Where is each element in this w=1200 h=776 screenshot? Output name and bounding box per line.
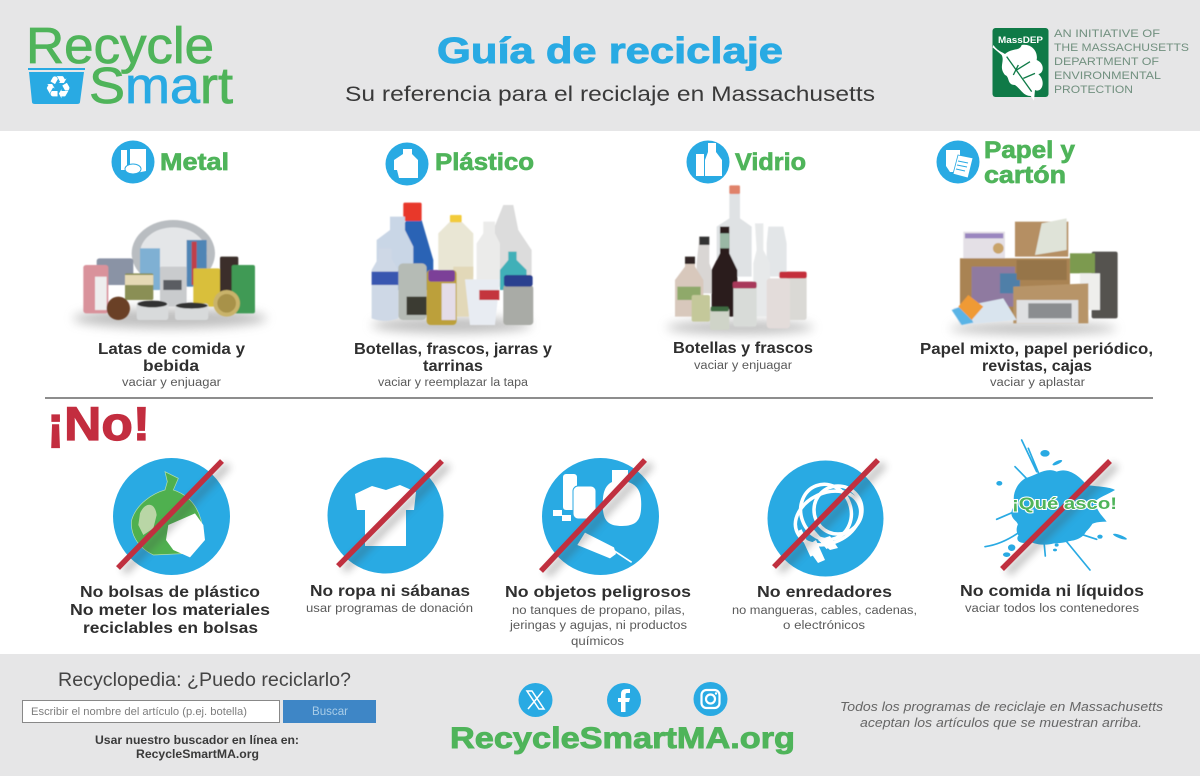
label: no hazardous objects (505, 584, 691, 648)
label: paper: vaciar y aplastar (990, 377, 1085, 389)
label: no clothing: usar programas de donación (306, 603, 473, 615)
item: no food or liquids (960, 440, 1144, 615)
label: no food or liquids (960, 583, 1144, 615)
note: aceptan los artículos que se muestran arriba. (860, 715, 1142, 730)
icon: Instagram (694, 682, 728, 716)
label: no plastic bags: No meter los materiales (70, 602, 270, 619)
icon: paper and cardboard (936, 140, 980, 184)
title: Guía de reciclaje (437, 30, 783, 71)
icon: metal cans (112, 140, 154, 184)
icon: hazardous objects crossed out (541, 458, 659, 575)
label: metal: bebida (143, 358, 199, 375)
label: paper: Papel mixto, papel periódico, (920, 341, 1153, 358)
label: metal (98, 341, 245, 389)
logo: Recycle Smart: Smart (89, 57, 233, 114)
item: no tanglers (732, 460, 917, 632)
label: paper (920, 341, 1153, 389)
label: no tanglers (732, 584, 917, 632)
heading: No: ¡No! (47, 397, 150, 450)
label: paper: revistas, cajas (982, 358, 1092, 375)
label: no plastic bags: No bolsas de plástico (80, 584, 260, 601)
panel: metal (73, 140, 267, 389)
photo: glass bottles (667, 185, 813, 334)
heading: Vidrio: Vidrio (735, 149, 806, 176)
label: no hazardous objects: químicos (571, 636, 624, 648)
logo: MassDEP: ENVIRONMENTAL (1054, 70, 1161, 82)
item: no plastic bags (70, 458, 270, 637)
footer band (0, 654, 1200, 776)
label: no plastic bags: reciclables en bolsas (83, 620, 258, 637)
icon: Facebook (607, 683, 641, 717)
label: no hazardous objects: No objetos peligrosos (505, 584, 691, 601)
icon: X (518, 683, 552, 717)
icon: splat crossed out (985, 440, 1127, 573)
search panel: Recyclopedia: Escribir el nombre del artículo (p.ej. botella) (31, 706, 247, 718)
icon: plastic bottles (386, 142, 428, 186)
logo: MassDEP: DEPARTMENT OF (1054, 56, 1159, 68)
website address: RecycleSmartMA.org (450, 722, 795, 755)
panel: plastic (354, 142, 552, 389)
search panel: Recyclopedia: RecycleSmartMA.org (136, 749, 259, 761)
logo: Recycle Smart (26, 17, 233, 114)
icon: shirt crossed out (328, 458, 448, 574)
heading: Metal: Metal (160, 149, 229, 176)
logo: MassDEP: MassDEP (998, 35, 1043, 45)
logo: Recycle Smart: Recycle (26, 17, 214, 74)
label: metal: Latas de comida y (98, 341, 245, 358)
label: no hazardous objects: jeringas y agujas, ni productos (509, 620, 687, 632)
label: glass: Botellas y frascos (673, 340, 813, 357)
note (840, 699, 1164, 730)
heading: Plástico: Plástico (435, 149, 534, 176)
search panel: Recyclopedia: Usar nuestro buscador en línea en: (95, 735, 299, 747)
label: metal: vaciar y enjuagar (122, 377, 221, 389)
icon: splat crossed out: ¡Qué asco! (1012, 494, 1117, 513)
logo: MassDEP: THE MASSACHUSETTS (1054, 42, 1189, 54)
logo: MassDEP (992, 28, 1189, 101)
panel: glass (667, 140, 813, 372)
icon: hoses and cables crossed out (768, 460, 884, 576)
note: Todos los programas de reciclaje en Massachusetts (840, 699, 1164, 714)
heading: Papel y cartón: Papel y (984, 137, 1076, 164)
label: no food or liquids: vaciar todos los contenedores (965, 603, 1139, 615)
header band (0, 0, 1200, 131)
heading: Papel y cartón (984, 137, 1076, 189)
search panel: Recyclopedia: Buscar (312, 706, 348, 718)
heading: Papel y cartón: cartón (984, 162, 1066, 189)
logo: MassDEP: AN INITIATIVE OF (1054, 28, 1160, 40)
photo: metal cans (73, 220, 267, 328)
panel: paper (920, 137, 1153, 389)
label: plastic: tarrinas (423, 358, 483, 375)
label: glass: vaciar y enjuagar (694, 360, 792, 372)
search panel: Recyclopedia: Recyclopedia: ¿Puedo reciclarlo? (58, 670, 351, 691)
item: no hazardous objects (505, 458, 691, 648)
search panel: Recyclopedia (22, 670, 376, 761)
label: plastic: Botellas, frascos, jarras y (354, 341, 552, 358)
label: no hazardous objects: no tanques de propano, pilas, (512, 605, 685, 617)
label: no tanglers: o electrónicos (783, 620, 865, 632)
logo: Recycle Smart: ♻ (44, 70, 72, 106)
label: no plastic bags (70, 584, 270, 637)
item: no clothing (306, 458, 473, 615)
label: glass (673, 340, 813, 372)
photo: paper and cardboard (950, 218, 1118, 334)
label: plastic (354, 341, 552, 389)
subtitle: Su referencia para el reciclaje en Massachusetts (345, 83, 875, 106)
label: no food or liquids: No comida ni líquidos (960, 583, 1144, 600)
icon: plastic bags crossed out (113, 458, 230, 575)
logo: MassDEP: PROTECTION (1054, 84, 1133, 96)
label: plastic: vaciar y reemplazar la tapa (378, 377, 529, 389)
label: no clothing (306, 583, 473, 615)
label: no tanglers: No enredadores (757, 584, 892, 601)
label: no tanglers: no mangueras, cables, cadenas, (732, 605, 917, 617)
icon: glass bottles (686, 140, 730, 184)
photo: plastic containers (372, 203, 533, 333)
label: no clothing: No ropa ni sábanas (310, 583, 470, 600)
